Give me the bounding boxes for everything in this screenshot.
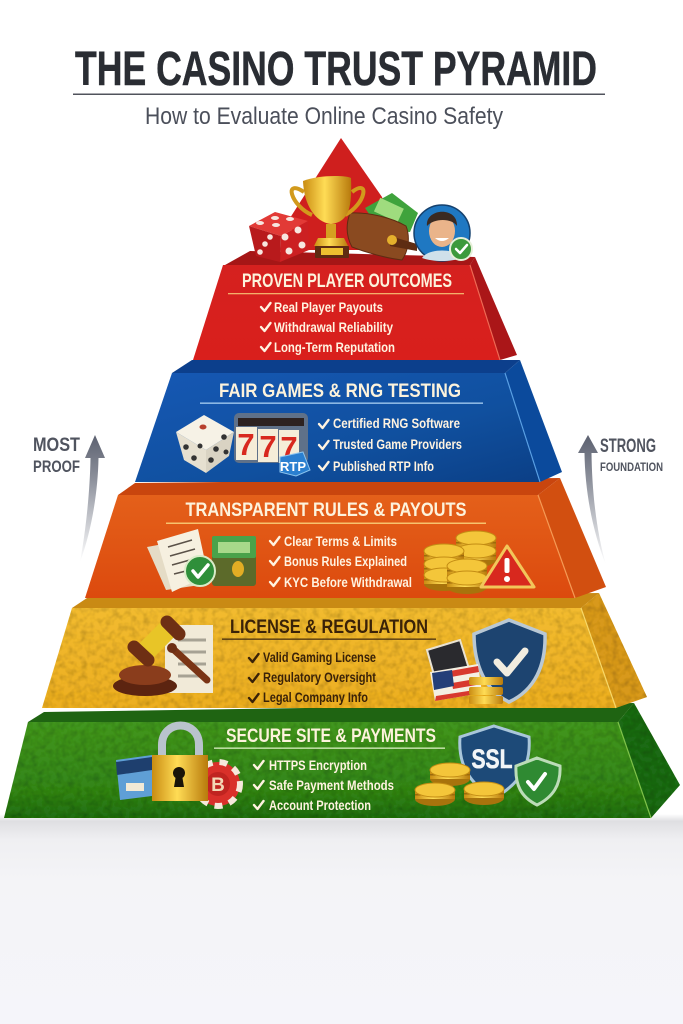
checklist bbox=[319, 416, 462, 474]
icon: shield, flag and coins bbox=[427, 620, 545, 704]
checklist: Real Player Payouts bbox=[274, 300, 383, 315]
icon: SSL shield: SSL bbox=[472, 744, 512, 774]
heading: SECURE SITE & PAYMENTS bbox=[226, 726, 436, 747]
icon: slot machine with RTP badge: RTP bbox=[280, 459, 306, 474]
arrow: upward strong foundation bbox=[578, 435, 606, 565]
icon: slot machine with RTP badge bbox=[234, 413, 310, 476]
icon: white die bbox=[176, 415, 234, 473]
right label: strong foundation bbox=[578, 435, 663, 565]
heading: FAIR GAMES & RNG TESTING bbox=[219, 381, 461, 402]
tier 1: proven player outcomes bbox=[193, 138, 517, 360]
subtitle: How to Evaluate Online Casino Safety bbox=[145, 103, 503, 130]
icon: red die bbox=[249, 212, 309, 262]
left label: most proof bbox=[33, 435, 105, 562]
checklist: Legal Company Info bbox=[263, 690, 368, 705]
checklist bbox=[254, 758, 394, 813]
icon: slot machine with RTP badge: 7 bbox=[280, 430, 298, 465]
checklist: Certified RNG Software bbox=[333, 416, 460, 431]
tier 4: license and regulation bbox=[42, 593, 647, 708]
checklist: Regulatory Oversight bbox=[263, 670, 376, 685]
icon: padlock, card and chip: B bbox=[211, 775, 225, 796]
checklist: HTTPS Encryption bbox=[269, 758, 367, 773]
checklist: Valid Gaming License bbox=[263, 650, 376, 665]
checklist: Withdrawal Reliability bbox=[274, 320, 393, 335]
icon: papers and green wallet bbox=[147, 529, 256, 592]
arrow: upward most proof bbox=[80, 435, 105, 562]
left label: most proof: PROOF bbox=[33, 457, 80, 476]
checklist bbox=[261, 300, 395, 355]
left label: most proof: MOST bbox=[33, 435, 80, 456]
tier 2: fair games and RNG testing bbox=[135, 360, 562, 482]
icon: player avatar with check bbox=[414, 205, 472, 261]
icon: gavel and document bbox=[113, 622, 213, 696]
checklist: Safe Payment Methods bbox=[269, 778, 394, 793]
right label: strong foundation: STRONG bbox=[600, 436, 656, 457]
checklist: Trusted Game Providers bbox=[333, 437, 462, 452]
right label: strong foundation: FOUNDATION bbox=[600, 460, 663, 474]
checklist bbox=[249, 650, 376, 705]
apex triangle bbox=[290, 138, 400, 250]
icon: padlock, card and chip bbox=[116, 726, 240, 806]
icon: slot machine with RTP badge: 7 bbox=[237, 427, 255, 462]
icon: gold coins bbox=[415, 763, 504, 806]
icon: wallet and cash bbox=[347, 193, 418, 260]
tier 3: transparent rules and payouts bbox=[85, 478, 606, 598]
checklist: Account Protection bbox=[269, 798, 371, 813]
heading: PROVEN PLAYER OUTCOMES bbox=[242, 271, 452, 292]
checklist: Clear Terms & Limits bbox=[284, 534, 397, 549]
icon: slot machine with RTP badge: 7 bbox=[259, 429, 277, 464]
heading: TRANSPARENT RULES & PAYOUTS bbox=[186, 500, 466, 521]
checklist: Bonus Rules Explained bbox=[284, 554, 407, 569]
checklist bbox=[270, 534, 412, 590]
icon: gold coins and warning bbox=[424, 531, 534, 594]
checklist: Long-Term Reputation bbox=[274, 340, 395, 355]
icon: trophy bbox=[292, 176, 363, 258]
checklist: KYC Before Withdrawal bbox=[284, 575, 412, 590]
checklist: Published RTP Info bbox=[333, 459, 434, 474]
icon: SSL shield bbox=[460, 726, 560, 805]
heading: LICENSE & REGULATION bbox=[230, 617, 428, 638]
tier 5: secure site and payments bbox=[4, 703, 680, 818]
